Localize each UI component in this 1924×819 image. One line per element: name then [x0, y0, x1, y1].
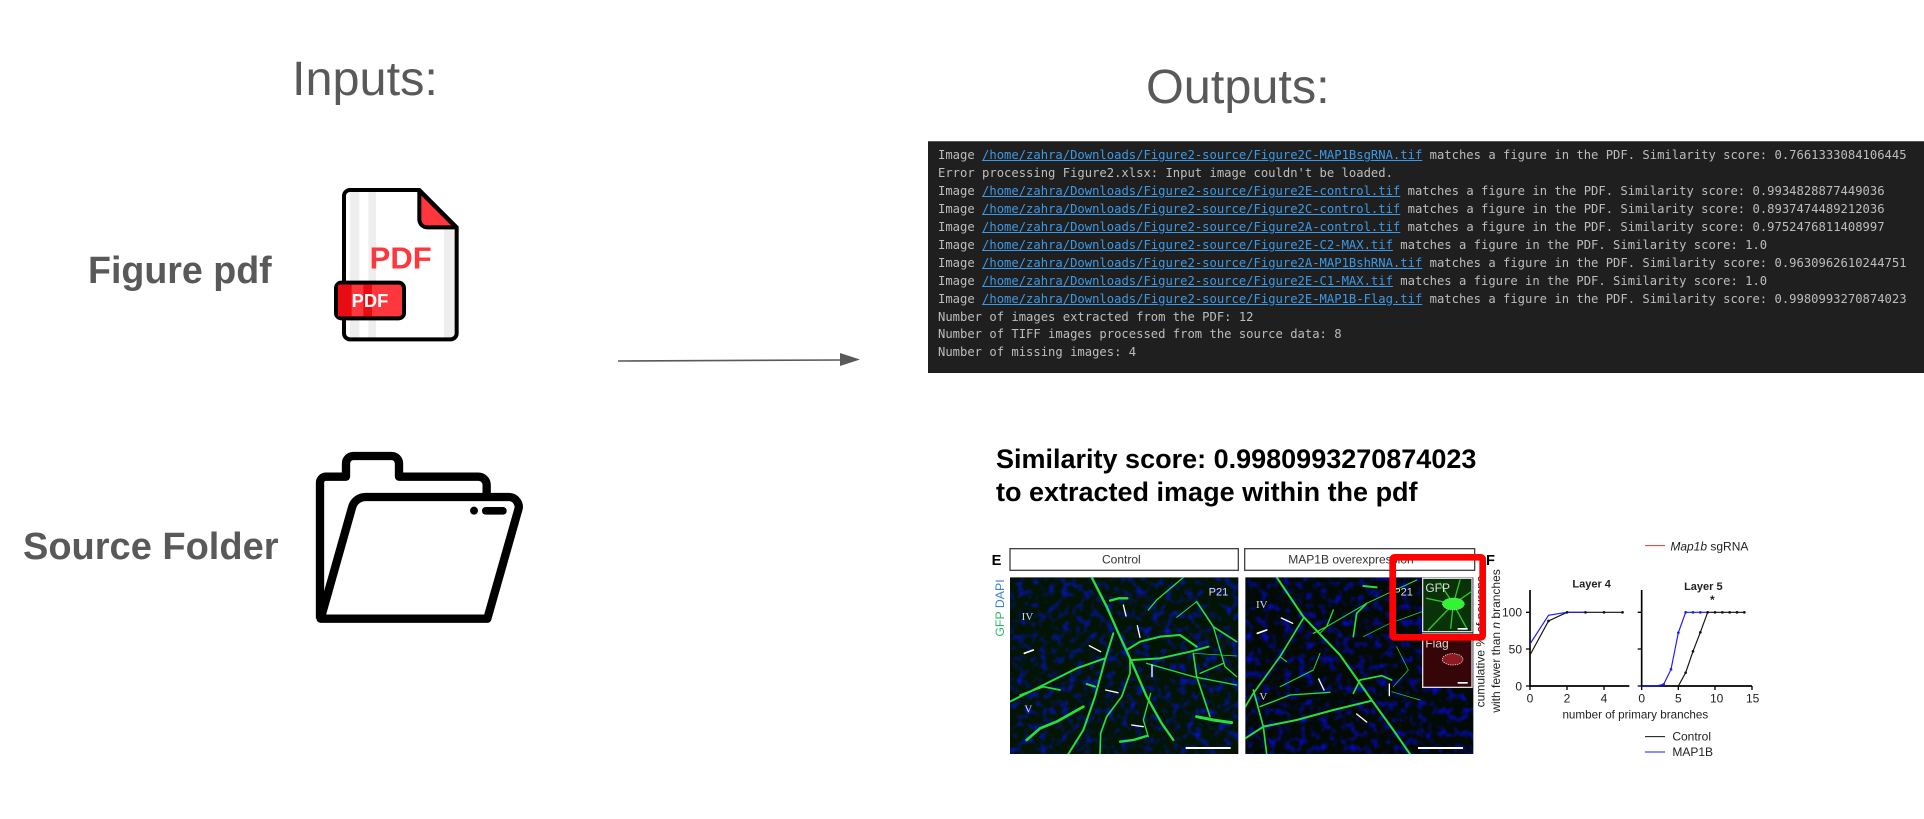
x axis label: number of primary branches	[1562, 709, 1708, 722]
chart: layer 5	[1638, 581, 1760, 706]
axis label: cumulative %: cumulative % of neurons	[1474, 576, 1488, 707]
header: MAP1B overexpression	[1245, 549, 1475, 570]
legend: Map1b sgRNA: Map1b sgRNA	[1670, 540, 1748, 554]
heading: inputs: Inputs:	[292, 52, 438, 106]
chart: layer 5: 15	[1746, 692, 1760, 706]
axis label: cumulative %	[1474, 569, 1503, 714]
legend: control and MAP1B: Control	[1672, 730, 1711, 744]
micrograph: control: V	[1024, 704, 1032, 716]
chart: layer 4: 100	[1502, 606, 1522, 620]
chart: layer 4: 50	[1509, 642, 1522, 656]
label: figure pdf: Figure pdf	[88, 249, 272, 291]
micrograph: MAP1B overexpression: V	[1259, 691, 1267, 703]
inset: GFP: GFP	[1425, 581, 1450, 595]
chart: layer 4: 2	[1564, 692, 1571, 706]
chart: layer 5: Layer 5	[1684, 581, 1723, 593]
panel letter F: F	[1486, 553, 1495, 569]
header: control	[1010, 549, 1238, 570]
chart: layer 5: 10	[1710, 692, 1724, 706]
panel letter E: E	[992, 553, 1002, 569]
inset: Flag	[1423, 634, 1472, 687]
heading: outputs: Outputs:	[1146, 60, 1330, 114]
panel: scientific figure	[992, 540, 1760, 759]
chart: layer 5: 0	[1638, 692, 1645, 706]
micrograph: MAP1B overexpression	[1245, 577, 1473, 754]
chart: layer 5: *	[1710, 593, 1715, 607]
arrow: inputs to outputs	[618, 353, 860, 366]
chart: layer 4	[1502, 578, 1629, 706]
icon: pdf file: PDF	[352, 290, 388, 311]
micrograph: control: IV	[1022, 611, 1033, 623]
axis label: cumulative %: with fewer than n branches	[1489, 569, 1503, 714]
axis label: GFP DAPI: GFP DAPI	[993, 579, 1007, 637]
micrograph: MAP1B overexpression: IV	[1256, 599, 1268, 611]
legend: control and MAP1B: MAP1B	[1672, 745, 1713, 759]
panel: terminal output: Image /home/zahra/Downloads/Figure2-source/Figure2C-MAP1BsgRNA.tif matches a figure in the PDF. Similarity score: 0.7661333084106445 Error processing Figure2.xlsx: Input image couldn't be loaded. Image /home/zahra/Downloads/Figure2-source/Figure2E-control.tif matches a figure in the PDF. Similarity score: 0.9934828877449036 Image /home/zahra/Downloads/Figure2-source/Figure2C-control.tif matches a figure in the PDF. Similarity score: 0.8937474489212036 Image /home/zahra/Downloads/Figure2-source/Figure2A-control.tif matches a figure in the PDF. Similarity score: 0.9752476811408997 Image /home/zahra/Downloads/Figure2-source/Figure2E-C2-MAX.tif matches a figure in the PDF. Similarity score: 1.0 Image /home/zahra/Downloads/Figure2-source/Figure2A-MAP1BshRNA.tif matches a figure in the PDF. Similarity score: 0.9630962610244751 Image /home/zahra/Downloads/Figure2-source/Figure2E-C1-MAX.tif matches a figure in the PDF. Similarity score: 1.0 Image /home/zahra/Downloads/Figure2-source/Figure2E-MAP1B-Flag.tif matches a figure in the PDF. Similarity score: 0.9980993270874023 Number of images extracted from the PDF: 12 Number of TIFF images processed from the source data: 8 Number of missing images: 4	[938, 148, 1907, 359]
legend: control and MAP1B	[1645, 730, 1713, 759]
highlight: red rectangle	[1393, 557, 1483, 637]
chart: layer 4: 4	[1601, 692, 1608, 706]
inset: GFP	[1423, 578, 1472, 632]
chart: layer 4: 0	[1527, 692, 1534, 706]
chart: layer 4: 0	[1515, 679, 1522, 693]
micrograph: MAP1B overexpression: P21	[1393, 586, 1413, 598]
chart: layer 5: 5	[1675, 692, 1682, 706]
header: control: Control	[1102, 552, 1141, 566]
label: source folder: Source Folder	[23, 526, 278, 568]
heading: similarity score: to extracted image within the pdf	[996, 477, 1418, 507]
icon: open folder	[316, 452, 523, 623]
header: MAP1B overexpression: MAP1B overexpression	[1288, 552, 1414, 566]
chart: layer 4: Layer 4	[1572, 578, 1612, 590]
micrograph: control: P21	[1209, 586, 1228, 598]
icon: pdf file	[334, 188, 459, 342]
icon: pdf file: PDF	[370, 240, 432, 275]
heading: similarity score: Similarity score: 0.9980993270874023	[996, 444, 1476, 474]
micrograph: control	[1010, 577, 1238, 754]
inset: Flag: Flag	[1425, 636, 1449, 650]
heading: similarity score	[996, 444, 1476, 507]
